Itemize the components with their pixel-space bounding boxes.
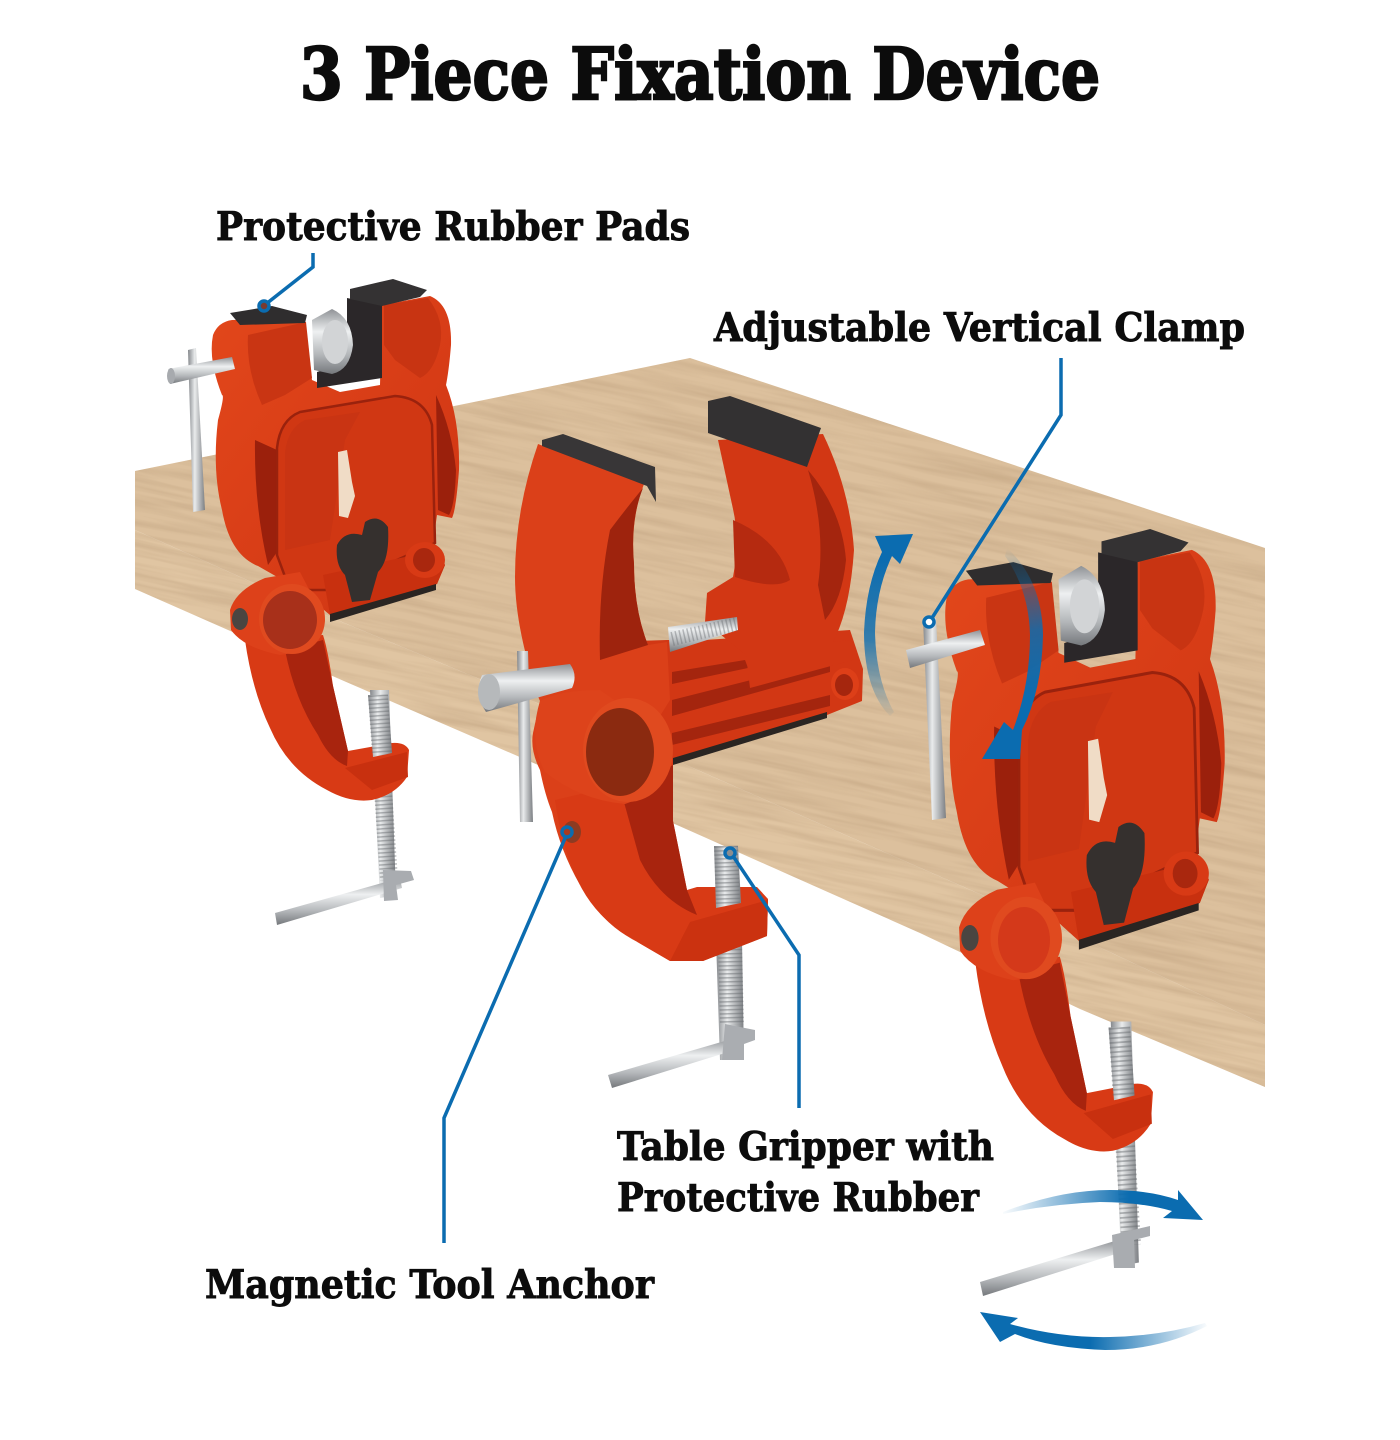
label: magnetic tool anchor: Magnetic Tool Anchor xyxy=(205,1262,654,1308)
label: table gripper with protective rubber xyxy=(617,1124,994,1221)
table top surface xyxy=(135,358,1265,1025)
arrow: tilt up xyxy=(864,534,913,716)
left jaw xyxy=(515,444,700,961)
clamp: right, assembled vise close-up xyxy=(906,529,1225,1296)
label: table gripper with protective rubber: Protective Rubber xyxy=(617,1175,979,1221)
callout lines xyxy=(266,253,1061,1243)
right jaw xyxy=(705,434,854,688)
upper screw xyxy=(714,846,741,908)
title: 3 Piece Fixation Device xyxy=(300,32,1100,116)
left jaw rubber pad xyxy=(542,434,656,502)
label: protective rubber pads: Protective Rubber Pads xyxy=(216,204,690,250)
threaded rod xyxy=(668,617,738,652)
T handle xyxy=(167,348,235,512)
lower arm xyxy=(555,760,768,961)
table front edge xyxy=(135,530,1265,1087)
clamp: middle, wide jaw position xyxy=(478,396,863,1088)
callout line: table gripper xyxy=(733,856,799,1108)
callout line: protective rubber pads xyxy=(266,253,313,304)
right jaw rubber pad xyxy=(708,396,821,467)
callout dots xyxy=(259,301,934,858)
callout line: magnetic tool anchor xyxy=(444,836,566,1243)
lower tommy bar xyxy=(980,1226,1150,1296)
T handle xyxy=(478,651,575,822)
lower screw xyxy=(608,940,755,1088)
arrow: screw turn left xyxy=(980,1312,1207,1350)
label: adjustable vertical clamp: Adjustable Vertical Clamp xyxy=(713,305,1245,351)
T handle xyxy=(906,618,985,820)
callout line: adjustable vertical clamp xyxy=(932,358,1061,618)
arrow: screw turn right xyxy=(1003,1190,1203,1220)
label: table gripper with protective rubber: Table Gripper with xyxy=(617,1124,994,1170)
table xyxy=(135,358,1265,1087)
tube head xyxy=(535,690,672,804)
clamp: left, assembled vise xyxy=(167,279,459,925)
lower tommy bar xyxy=(275,870,414,925)
rail body xyxy=(600,630,863,780)
magnetic anchor dot xyxy=(563,821,581,843)
arrow: tilt down xyxy=(982,548,1043,759)
